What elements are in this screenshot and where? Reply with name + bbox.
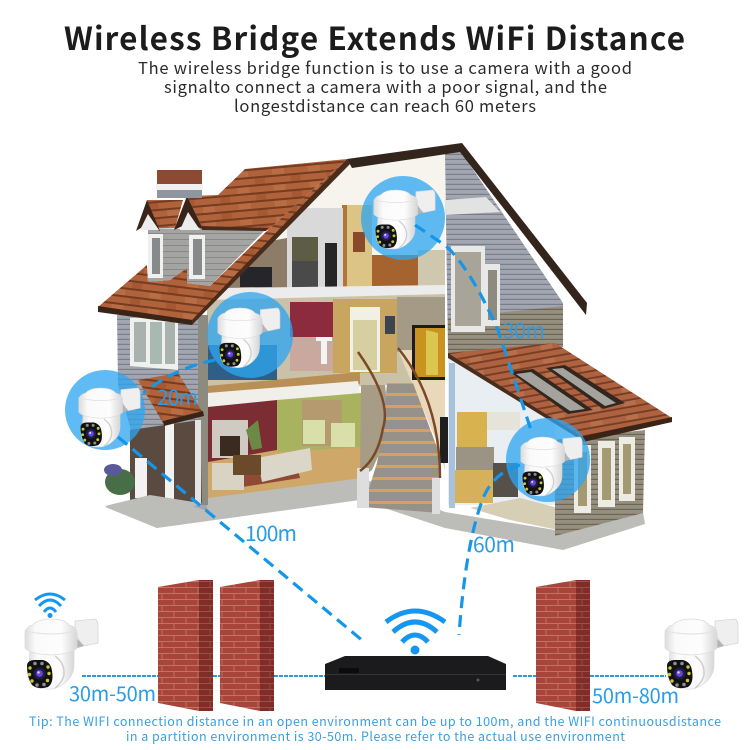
lower roof bbox=[98, 159, 347, 322]
label 30m-50m: 30m-50m bbox=[69, 678, 156, 707]
brick wall 2 bbox=[220, 580, 274, 711]
dormer walls bbox=[148, 228, 266, 286]
label 20m: 20m bbox=[157, 382, 198, 412]
right roof dark edge bbox=[347, 143, 587, 315]
dotted signal line right bbox=[513, 675, 666, 677]
ground slab bbox=[105, 477, 645, 550]
left wall siding bbox=[117, 310, 207, 510]
camera right with blue circle bbox=[506, 418, 590, 502]
second floor interior bbox=[207, 294, 448, 470]
brick wall 3 bbox=[536, 580, 590, 711]
roof right edge line bbox=[192, 159, 350, 325]
icon: large wifi bbox=[386, 611, 445, 654]
label 100m: 100m bbox=[245, 518, 297, 548]
label 30m: 30m bbox=[503, 315, 545, 345]
dashed link 100m bbox=[118, 437, 363, 641]
dashed link 60m bbox=[459, 465, 520, 635]
brick wall 1 bbox=[158, 580, 213, 711]
recorder box bbox=[325, 656, 506, 690]
label 50m-80m: 50m-80m bbox=[592, 680, 679, 709]
subtitle text block: signalto connect a camera with a poor signal, and the bbox=[164, 74, 607, 98]
dotted signal line left bbox=[82, 675, 325, 677]
house cutaway illustration bbox=[98, 143, 672, 550]
camera top with blue circle bbox=[361, 176, 445, 260]
staircase bbox=[357, 348, 440, 514]
dormer 2 trim bbox=[174, 196, 268, 231]
top floor interior bbox=[205, 152, 445, 300]
roof eave bbox=[98, 306, 192, 325]
right extension wall bbox=[555, 430, 645, 536]
subtitle text block bbox=[138, 55, 632, 117]
upper roof bbox=[187, 159, 347, 230]
left wall window bbox=[130, 316, 178, 370]
second floor slab bbox=[207, 381, 360, 407]
subtitle text block: The wireless bridge function is to use a camera with a good bbox=[138, 55, 632, 79]
camera middle with blue circle bbox=[207, 292, 293, 378]
subtitle text block: longestdistance can reach 60 meters bbox=[234, 93, 536, 117]
chimney bbox=[156, 170, 203, 198]
label 60m: 60m bbox=[473, 529, 515, 559]
dormer 1 roof bbox=[136, 200, 183, 231]
dashed link 30m bbox=[415, 225, 532, 433]
dashed link 20m bbox=[143, 360, 215, 393]
top floor slab bbox=[213, 285, 445, 300]
camera bottom left bbox=[25, 619, 98, 689]
tip text block bbox=[29, 711, 721, 745]
right gable wall bbox=[445, 150, 563, 355]
ground floor interior bbox=[208, 393, 362, 498]
right extension roof with skylights bbox=[448, 343, 672, 442]
gable window bbox=[451, 246, 500, 332]
porch bbox=[104, 373, 204, 528]
camera bottom right bbox=[665, 619, 738, 689]
camera left with blue circle bbox=[65, 370, 145, 450]
tip text block: Tip: The WIFI connection distance in an open environment can be up to 100m, and the WIFI continuousdistance bbox=[29, 711, 721, 730]
title: Wireless Bridge Extends WiFi Distance bbox=[64, 14, 685, 60]
icon: small wifi bbox=[35, 594, 65, 618]
tip text block: in a partition environment is 30-50m. Please refer to the actual use environment bbox=[126, 726, 625, 745]
kitchen interior bbox=[448, 356, 558, 530]
